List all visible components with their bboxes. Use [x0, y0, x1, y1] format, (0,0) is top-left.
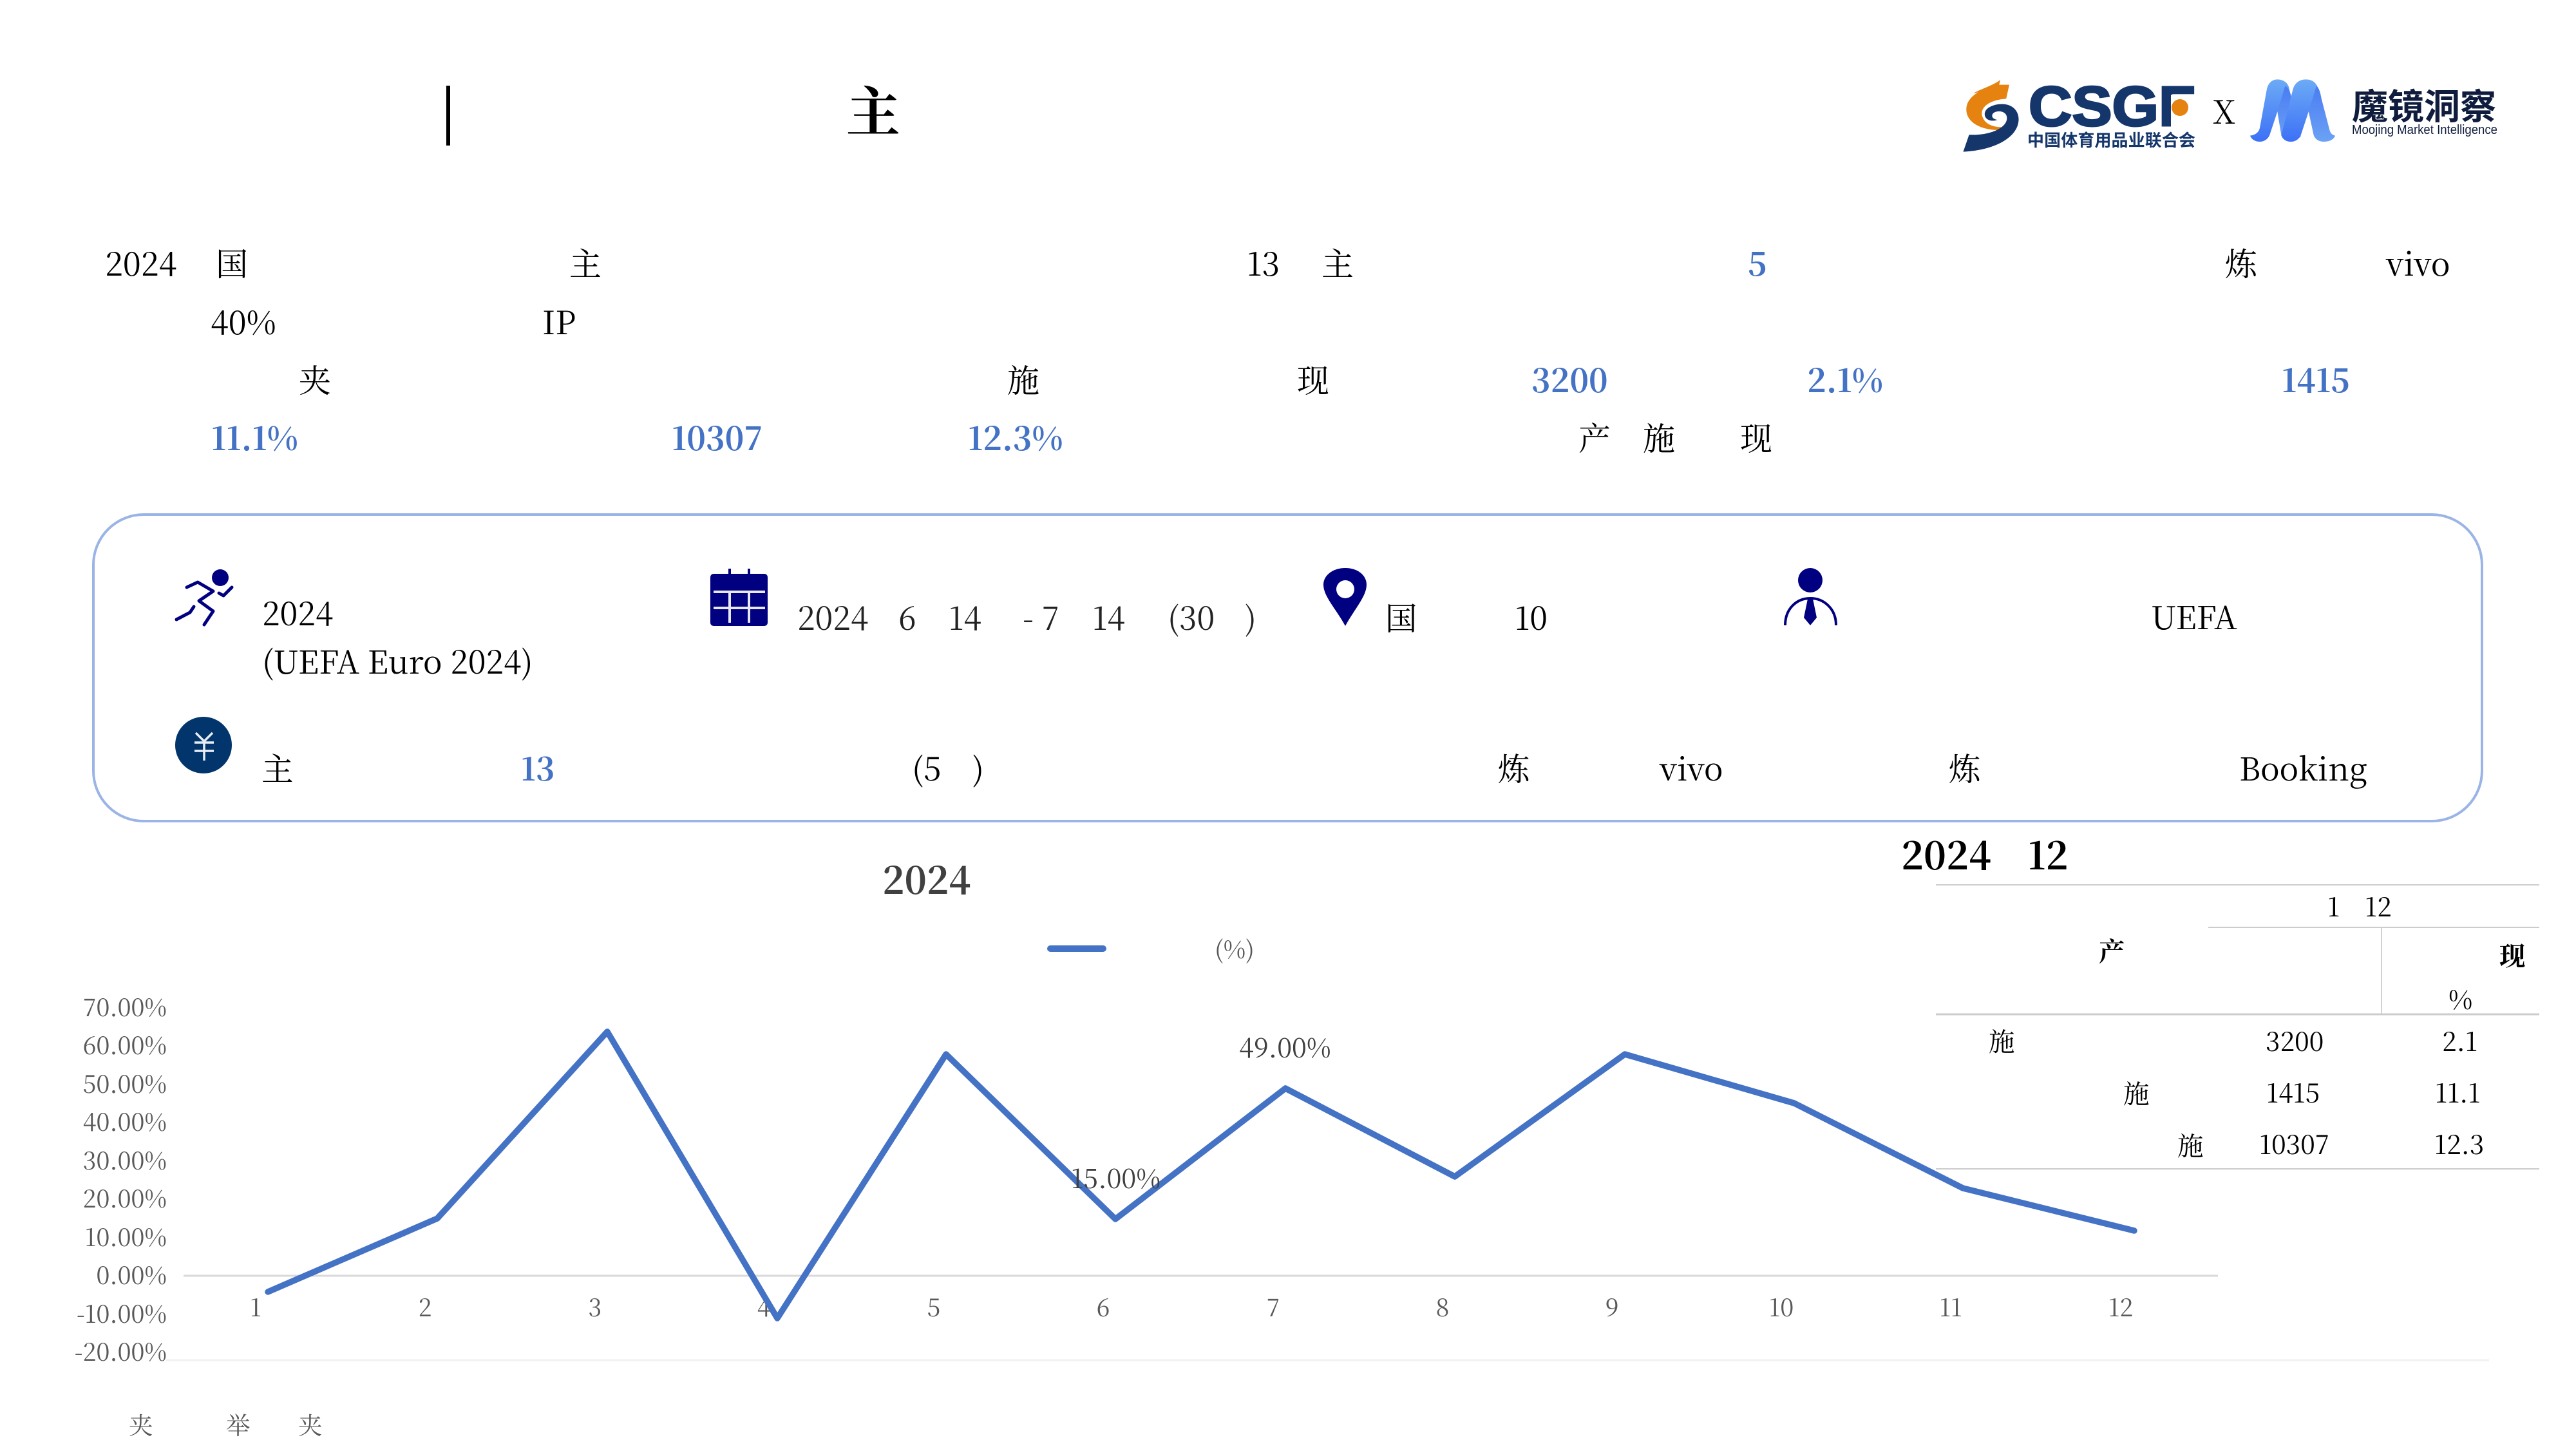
- chart title: 2024: [882, 851, 971, 905]
- x axis labels: 1: [250, 1289, 261, 1323]
- text: event name: (UEFA Euro 2024): [262, 638, 533, 683]
- text: sponsors row: 13: [521, 744, 554, 790]
- source note: 举: [226, 1406, 250, 1441]
- y axis labels: 0.00%: [96, 1256, 167, 1291]
- line chart: [75, 851, 2489, 1368]
- intro paragraph: 炼: [2225, 239, 2259, 285]
- logo: Moojing: 魔镜洞察: [2352, 87, 2496, 127]
- logo: CSGF: 中国体育用品业联合会: [2027, 131, 2195, 150]
- y axis labels: [75, 989, 167, 1368]
- intro paragraph: 夹: [299, 355, 331, 402]
- text: event name: [262, 589, 533, 683]
- intro paragraph: 主: [569, 239, 601, 285]
- intro paragraph: 12.3%: [968, 413, 1063, 460]
- x axis labels: 3: [589, 1289, 601, 1323]
- table header: [2099, 886, 2526, 1017]
- text: sponsors row: Booking: [2239, 744, 2367, 790]
- legend: (%): [1215, 931, 1255, 965]
- x axis labels: 2: [419, 1289, 431, 1323]
- table rows: 2.1: [2442, 1021, 2477, 1059]
- icon: person: [1785, 568, 1836, 625]
- y axis labels: 70.00%: [83, 989, 167, 1023]
- logo: CSGF: CSGF: [2029, 75, 2195, 138]
- intro paragraph: 40%: [211, 298, 276, 344]
- source note: 夹: [298, 1406, 322, 1441]
- table header: 产: [2099, 931, 2125, 969]
- text: dates: - 7: [1023, 594, 1059, 639]
- text: location: 10: [1515, 594, 1548, 639]
- text: sponsors row: 炼: [1498, 744, 1531, 790]
- table rows: 11.1: [2435, 1072, 2480, 1110]
- text: dates: 14: [1092, 594, 1125, 639]
- intro paragraph: 11.1%: [211, 413, 298, 460]
- table header: 12: [2365, 886, 2392, 924]
- table rows: [1989, 1021, 2484, 1163]
- intro paragraph: [105, 239, 2450, 460]
- table rows: 1415: [2266, 1072, 2320, 1110]
- table heading: 12: [2028, 826, 2069, 880]
- icon: runner: [176, 569, 232, 625]
- table heading: 2024: [1901, 826, 1991, 880]
- y axis labels: -10.00%: [77, 1295, 167, 1330]
- table rows: 施: [1989, 1021, 2014, 1059]
- data labels: [1071, 1027, 1331, 1196]
- icon: map pin: [1323, 568, 1367, 626]
- y axis labels: 40.00%: [83, 1103, 167, 1138]
- data labels: 15.00%: [1071, 1158, 1160, 1196]
- table header: 1: [2327, 886, 2340, 924]
- text: event name: 2024: [262, 589, 333, 635]
- y axis labels: 10.00%: [85, 1218, 167, 1253]
- x axis labels: 4: [757, 1289, 771, 1323]
- data line: [268, 1032, 2134, 1318]
- text: dates: [797, 594, 1256, 639]
- data table: [1936, 885, 2539, 1169]
- text: dates: 14: [949, 594, 981, 639]
- intro paragraph: 主: [1321, 239, 1354, 285]
- intro paragraph: 施: [1007, 355, 1039, 402]
- intro paragraph: 13: [1247, 239, 1280, 285]
- intro paragraph: 1415: [2282, 355, 2350, 402]
- table rows: 12.3: [2434, 1124, 2484, 1162]
- x axis labels: 5: [927, 1289, 940, 1323]
- y axis labels: 20.00%: [83, 1180, 167, 1215]
- y axis labels: 30.00%: [83, 1142, 167, 1177]
- text: dates: 2024: [797, 594, 868, 639]
- y axis labels: -20.00%: [75, 1333, 167, 1368]
- x axis labels: 6: [1097, 1289, 1110, 1323]
- x axis labels: 11: [1939, 1289, 1962, 1323]
- text: organizer: UEFA: [2151, 593, 2237, 639]
- table rows: 3200: [2266, 1021, 2324, 1059]
- icon: calendar: [710, 569, 768, 626]
- logo separator x: X: [2213, 87, 2235, 133]
- text: sponsors row: [261, 744, 2367, 790]
- x axis labels: [250, 1289, 2133, 1323]
- table header: %: [2448, 979, 2472, 1017]
- text: sponsors row: 主: [261, 744, 294, 790]
- table rows: 施: [2123, 1073, 2150, 1111]
- x axis labels: 8: [1436, 1289, 1449, 1323]
- intro paragraph: 产: [1578, 413, 1611, 460]
- table rows: 施: [2177, 1125, 2204, 1163]
- source note: [129, 1406, 322, 1441]
- x axis labels: 10: [1769, 1289, 1794, 1323]
- x axis labels: 7: [1267, 1289, 1280, 1323]
- intro paragraph: IP: [542, 298, 576, 344]
- y axis labels: 60.00%: [83, 1027, 167, 1061]
- title: [446, 70, 900, 147]
- intro paragraph: vivo: [2385, 239, 2450, 285]
- text: sponsors row: ): [972, 744, 984, 790]
- text: sponsors row: vivo: [1659, 744, 1723, 790]
- intro paragraph: 2.1%: [1807, 355, 1883, 402]
- intro paragraph: 3200: [1531, 355, 1608, 402]
- intro paragraph: 5: [1748, 239, 1767, 285]
- title: 主: [846, 70, 900, 147]
- intro paragraph: 2024: [105, 239, 176, 285]
- intro paragraph: 施: [1643, 413, 1675, 460]
- logo: Moojing: [2250, 79, 2497, 142]
- table header: 现: [2499, 935, 2526, 973]
- panel: event facts: [93, 515, 2482, 821]
- text: location: [1385, 594, 1548, 639]
- data labels: 49.00%: [1239, 1027, 1331, 1065]
- text: dates: 6: [898, 594, 916, 639]
- y axis labels: 50.00%: [83, 1065, 167, 1100]
- intro paragraph: 国: [216, 239, 248, 285]
- text: dates: ): [1245, 594, 1256, 639]
- intro paragraph: 现: [1297, 355, 1329, 402]
- text: dates: (30: [1168, 594, 1215, 639]
- intro paragraph: 10307: [672, 413, 763, 460]
- intro paragraph: 现: [1740, 413, 1772, 460]
- source note: 夹: [129, 1406, 153, 1441]
- table rows: 10307: [2259, 1124, 2329, 1162]
- x axis labels: 9: [1605, 1289, 1619, 1323]
- text: location: 国: [1385, 594, 1417, 639]
- icon: yen coin: [175, 717, 232, 773]
- x axis labels: 12: [2108, 1289, 2133, 1323]
- logo: CSGF: [1963, 75, 2198, 152]
- logo: Moojing: Moojing Market Intelligence: [2352, 123, 2497, 137]
- text: sponsors row: 炼: [1949, 744, 1982, 790]
- text: sponsors row: (5: [912, 744, 942, 790]
